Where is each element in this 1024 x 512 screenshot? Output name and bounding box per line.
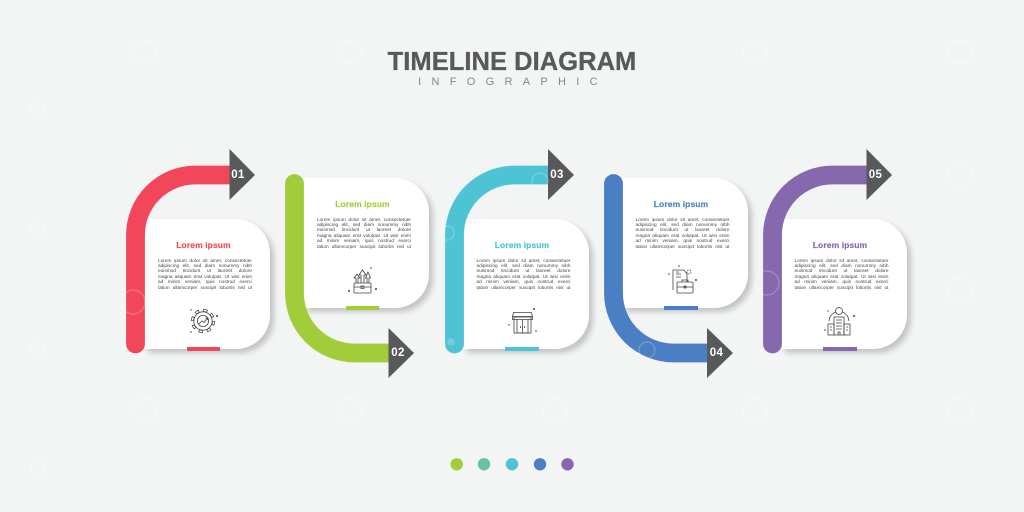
number 03: 03	[550, 169, 564, 181]
card 02	[303, 178, 429, 308]
card 02 accent bar	[346, 306, 379, 310]
card 01 body text: adipiscing elit, sed diam nonummy nibh	[158, 264, 252, 269]
card 03 body text: Lorem ipsum dolor sit amet, consectetuer	[476, 258, 570, 264]
step 02	[285, 174, 436, 378]
card 03 accent bar	[505, 346, 538, 351]
card 04 heading: Lorem ipsum	[654, 199, 708, 209]
card 01 body text: ad minim veniam, quis nostrud exerci	[158, 280, 252, 285]
card 05 body text: euismod tincidunt ut laoreet dolore	[794, 269, 888, 274]
card 03 body text: magna aliquam erat volutpat. Ut wisi enim	[476, 275, 570, 280]
card 03 body text: ad minim veniam, quis nostrud exerci	[476, 280, 570, 285]
card 05 heading: Lorem ipsum	[813, 240, 867, 250]
card 01 body text: tation ullamcorper suscipit lobortis nisl ut	[158, 286, 252, 291]
card 04 accent bar	[664, 306, 698, 310]
card 01 heading: Lorem ipsum	[176, 240, 231, 250]
number 02: 02	[391, 347, 405, 359]
card 02 body text	[317, 218, 411, 250]
card 03 body text: tation ullamcorper suscipit lobortis nisl ut	[476, 286, 570, 291]
card 03 body text: adipiscing elit, sed diam nonummy nibh	[476, 264, 570, 269]
curved arrow 03	[445, 149, 574, 354]
card 04 body text: magna aliquam erat volutpat. Ut wisi enim	[636, 234, 730, 239]
card 05 body text: magna aliquam erat volutpat. Ut wisi enim	[794, 275, 888, 280]
card 01 body text: euismod tincidunt ut laoreet dolore	[158, 269, 252, 274]
icon: gear with chart	[190, 308, 218, 334]
icon: storefront	[508, 308, 537, 334]
card 04 body text: adipiscing elit, sed diam nonummy nibh	[636, 223, 730, 228]
number 04: 04	[710, 347, 723, 359]
card 03 body text: euismod tincidunt ut laoreet dolore	[476, 269, 570, 274]
step 04	[604, 174, 754, 378]
card 05 body text: Lorem ipsum dolor sit amet, consectetuer	[794, 258, 888, 264]
subtitle: INFOGRAPHIC	[418, 76, 608, 88]
card 03 body text	[476, 258, 570, 291]
card 04 body text: ad minim veniam, quis nostrud exerci	[636, 239, 730, 244]
step 05	[763, 149, 914, 356]
card 05	[780, 219, 906, 349]
step 01	[126, 149, 276, 356]
card 04 body text: Lorem ipsum dolor sit amet, consectetuer	[636, 218, 730, 222]
card 01 body text: Lorem ipsum dolor sit amet, consectetuer	[158, 258, 252, 264]
curved arrow 01	[126, 149, 255, 354]
card 01 accent bar	[186, 346, 220, 351]
step 03	[445, 149, 596, 356]
card 04 body text: euismod tincidunt ut laoreet dolore	[636, 228, 730, 233]
pagination dots	[450, 458, 574, 470]
card 02 body text: tation ullamcorper suscipit lobortis nisl ut	[317, 245, 411, 250]
icon: office buildings with dollar	[824, 307, 855, 336]
card 01 body text	[158, 258, 252, 291]
card 01 body text: magna aliquam erat volutpat. Ut wisi enim	[158, 275, 252, 280]
curved arrow 02	[285, 174, 414, 378]
card 03	[462, 219, 588, 349]
curved arrow 05	[763, 149, 892, 354]
icon: briefcase with documents	[668, 265, 697, 294]
card 04 body text: tation ullamcorper suscipit lobortis nisl ut	[636, 245, 730, 250]
card 04 body text	[636, 218, 730, 250]
card 05 body text: tation ullamcorper suscipit lobortis nisl ut	[794, 286, 888, 291]
card 05 body text: ad minim veniam, quis nostrud exerci	[794, 280, 888, 285]
curved arrow 04	[604, 174, 733, 378]
card 02 body text: Lorem ipsum dolor sit amet, consectetuer	[317, 218, 411, 222]
card 03 heading: Lorem ipsum	[495, 240, 549, 250]
card 02 heading: Lorem ipsum	[335, 199, 390, 209]
number 01: 01	[231, 169, 245, 181]
title: TIMELINE DIAGRAM	[388, 48, 636, 76]
card 02 body text: adipiscing elit, sed diam nonummy nibh	[317, 223, 411, 228]
card 04	[622, 178, 748, 308]
card 05 accent bar	[823, 346, 856, 351]
card 01	[144, 219, 270, 349]
icon: briefcase with arrows	[348, 267, 377, 294]
card 02 body text: euismod tincidunt ut laoreet dolore	[317, 228, 411, 233]
card 02 body text: ad minim veniam, quis nostrud exerci	[317, 239, 411, 244]
card 02 body text: magna aliquam erat volutpat. Ut wisi enim	[317, 234, 411, 239]
number 05: 05	[869, 169, 882, 181]
card 05 body text	[794, 258, 888, 291]
card 05 body text: adipiscing elit, sed diam nonummy nibh	[794, 264, 888, 269]
